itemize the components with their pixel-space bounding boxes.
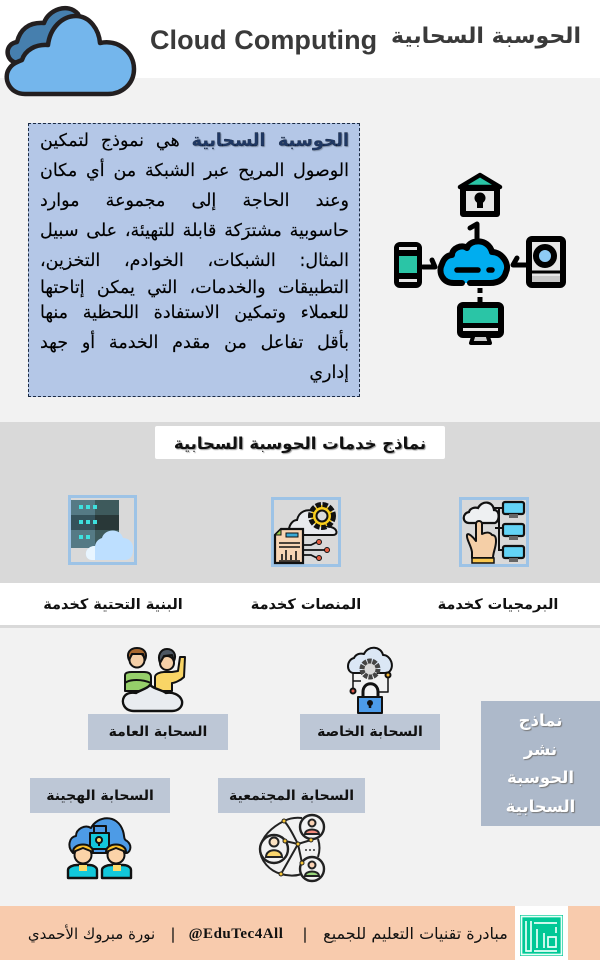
title arabic: الحوسبة السحابية (391, 24, 581, 49)
definition line 3: وعند الحاجة إلى مجموعة موارد (40, 191, 349, 211)
icon: community cloud (258, 814, 326, 882)
panel: deployment models: الحوسبة (507, 768, 574, 787)
label: platform as a service: المنصات كخدمة (251, 597, 361, 613)
panel: deployment models: نشر (524, 740, 557, 759)
definition line 9: إداري (309, 363, 349, 383)
tile: hybrid cloud: السحابة الهجينة (46, 788, 154, 804)
label: infrastructure as a service: البنية التحتية كخدمة (43, 597, 183, 613)
heading: service models (155, 426, 445, 459)
definition line 6: التطبيقات والخدمات، التي يمكن إتاحتها (40, 278, 349, 298)
footer handle: @EduTec4All (189, 926, 283, 942)
footer logo (515, 906, 568, 960)
panel: deployment models: السحابية (506, 797, 575, 816)
icon: public cloud (122, 647, 186, 712)
icon: software as a service (459, 497, 529, 567)
icon: platform as a service (271, 497, 341, 567)
footer author: نورة مبروك الأحمدي (28, 925, 155, 943)
icon: hybrid cloud (66, 817, 132, 880)
definition line 2: الوصول المريح عبر الشبكة من أي مكان (40, 161, 349, 181)
definition line 7: للعملاء وتمكين الاستفادة اللحظية منها (40, 303, 349, 323)
icon: infrastructure as a service (68, 495, 137, 565)
panel: deployment models (481, 701, 600, 826)
header band (0, 0, 600, 78)
tile: private cloud (300, 714, 440, 750)
icon: private cloud (347, 646, 393, 714)
definition line 1: الحوسبة السحابية هي نموذج لتمكين (40, 131, 349, 151)
label: software as a service: البرمجيات كخدمة (438, 597, 558, 613)
footer initiative: مبادرة تقنيات التعليم للجميع (323, 924, 508, 943)
definition line 4: حاسوبية مشترَكة قابلة للتهيئة، على سبيل (40, 221, 349, 241)
heading: service models: نماذج خدمات الحوسبة السحابية (174, 434, 426, 453)
white label band (0, 583, 600, 625)
title english: Cloud Computing (150, 25, 377, 55)
tile: community cloud (218, 778, 365, 813)
definition line 5: المثال: الشبكات، الخوادم، التخزين، (40, 251, 349, 271)
icon: title cloud (4, 6, 136, 96)
panel: deployment models: نماذج (519, 711, 562, 730)
footer separator: | (302, 925, 308, 943)
footer band (0, 906, 600, 960)
community dots (305, 849, 315, 851)
footer separator: | (170, 925, 176, 943)
tile: public cloud (88, 714, 228, 750)
services band (0, 422, 600, 583)
tile: public cloud: السحابة العامة (109, 724, 207, 740)
tile: private cloud: السحابة الخاصة (317, 724, 423, 740)
panel: definition (28, 123, 360, 397)
definition line 8: بأقل تفاعل من مقدم الخدمة أو جهد (40, 333, 349, 353)
icon: cloud network (394, 172, 566, 345)
tile: community cloud: السحابة المجتمعية (229, 788, 354, 804)
tile: hybrid cloud (30, 778, 170, 813)
